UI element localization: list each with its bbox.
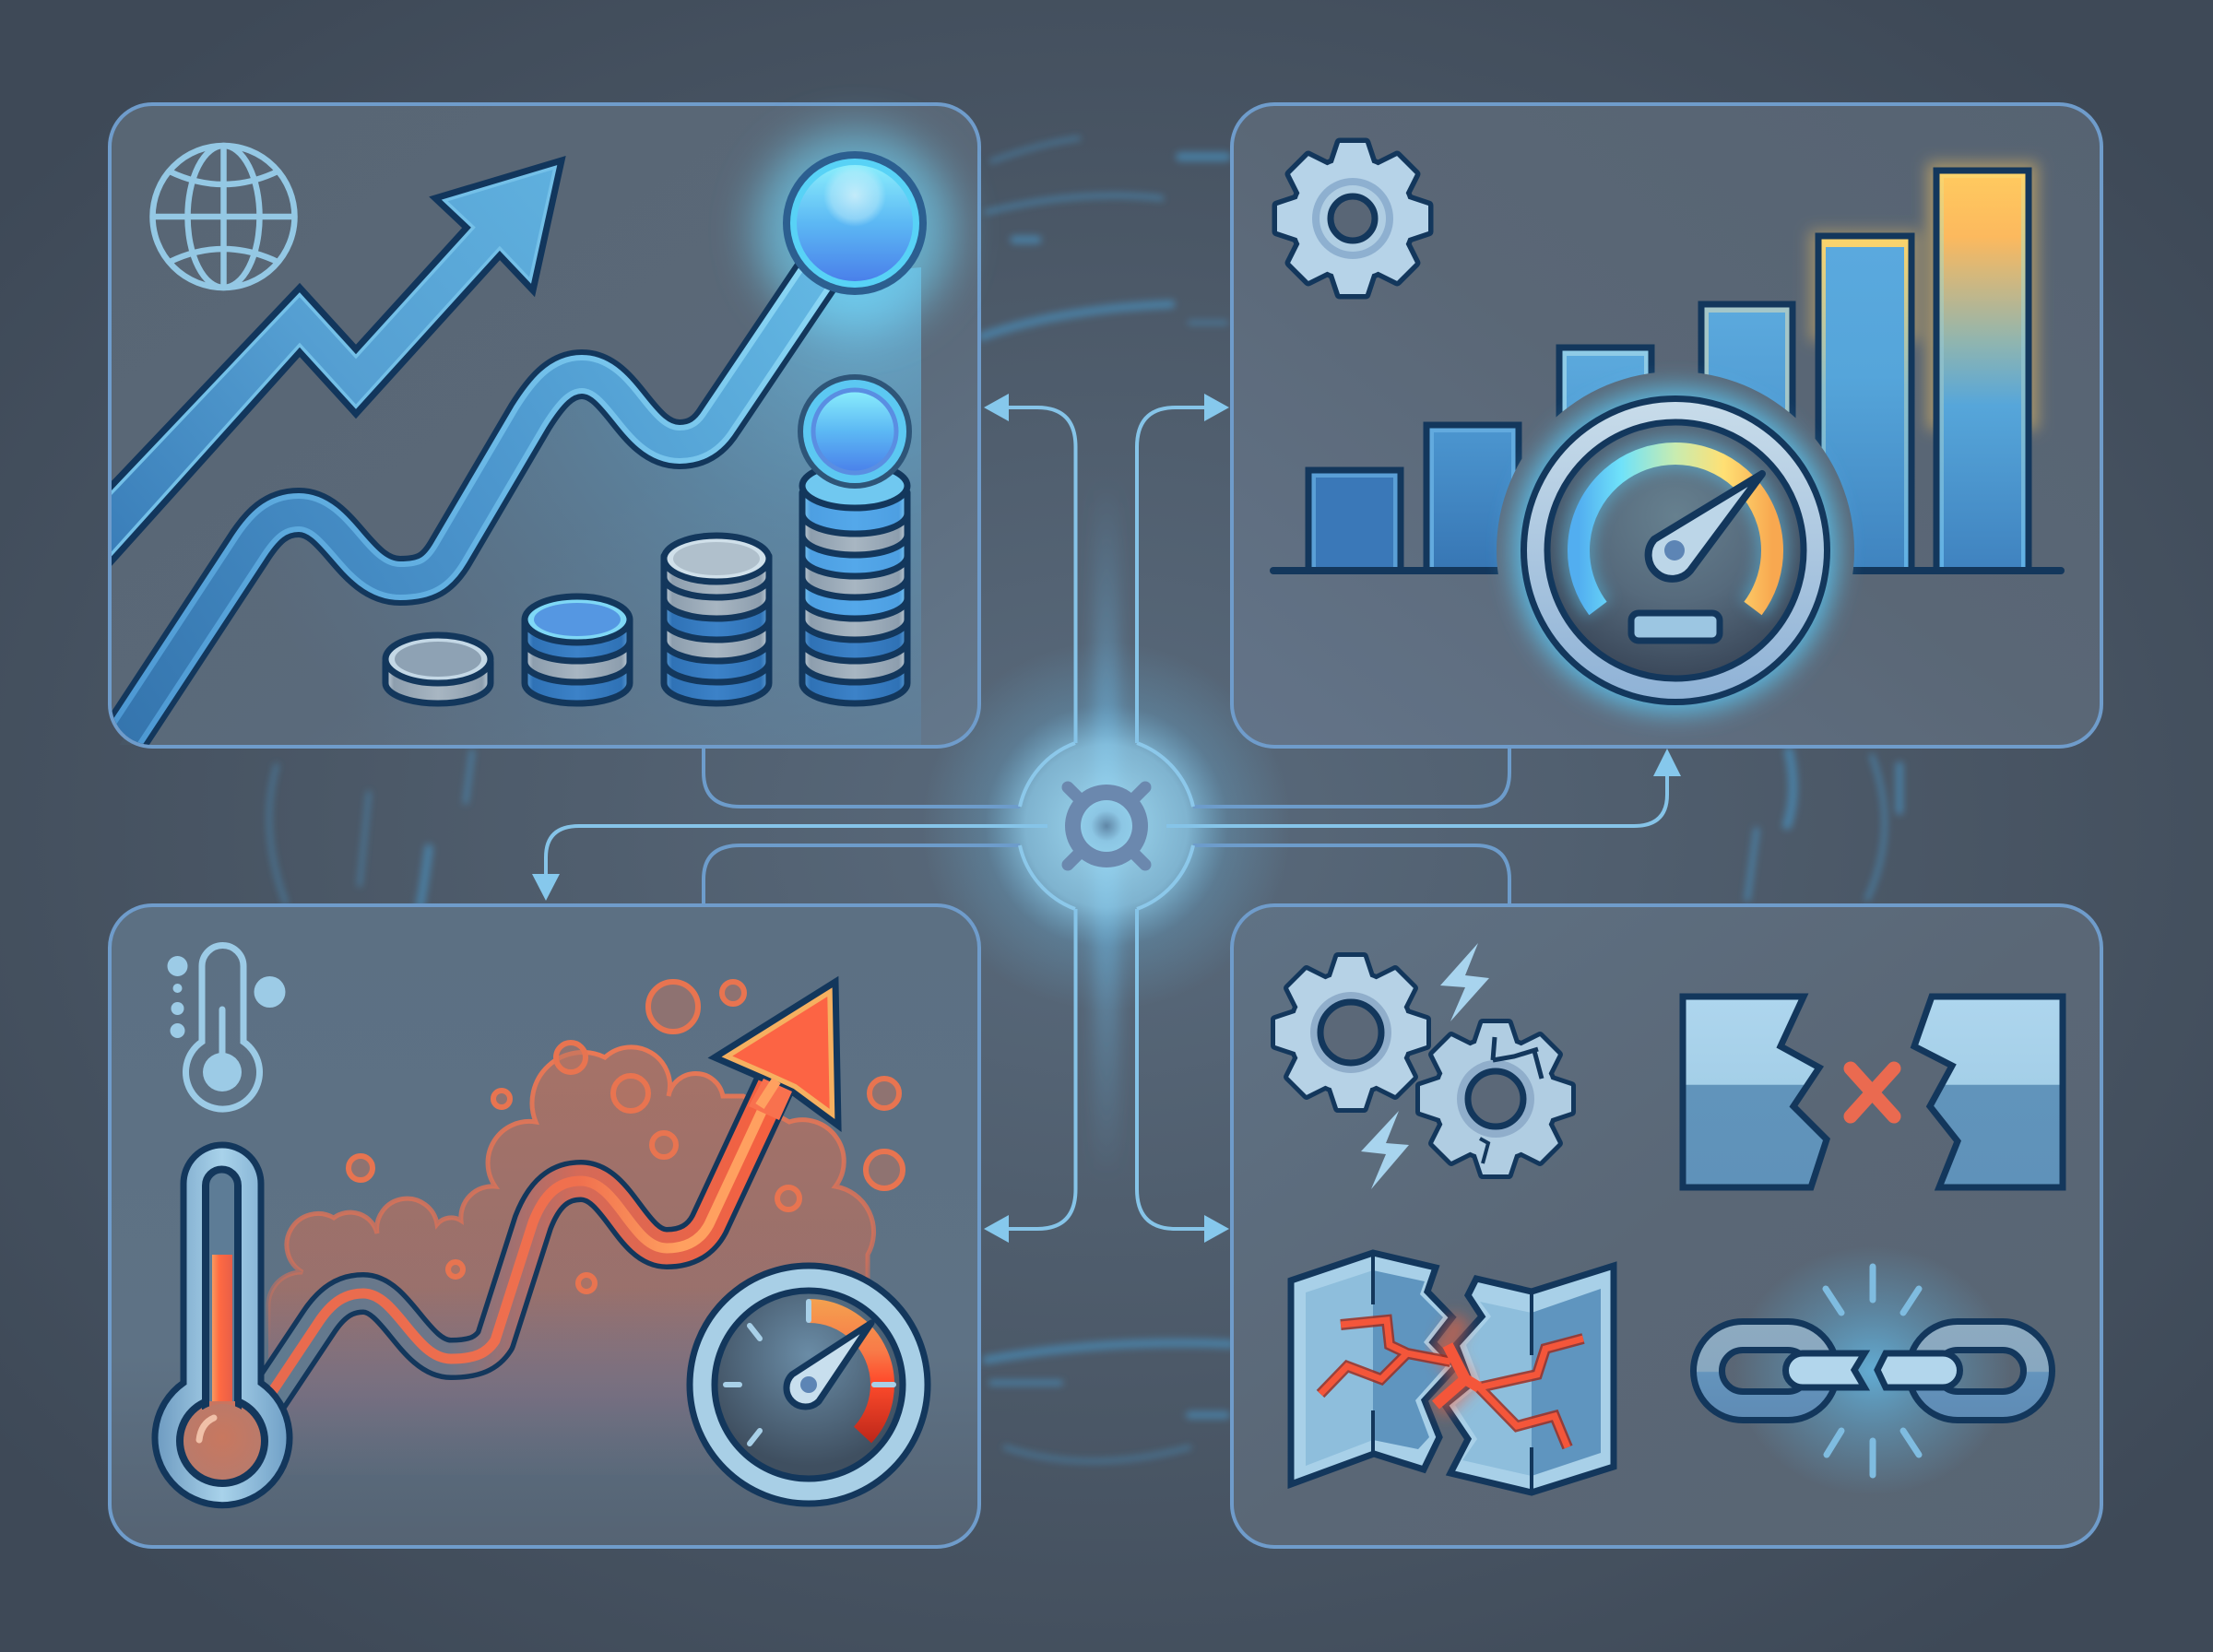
- break glow: [1734, 1246, 2011, 1495]
- large thermometer: [155, 1145, 290, 1505]
- arrow to top-right panel: [1137, 394, 1229, 743]
- coin stack 3: [664, 536, 769, 703]
- rising heat line: [263, 1074, 779, 1406]
- rising arrow: [92, 160, 562, 583]
- coin on top of stack: [800, 377, 909, 486]
- bar 6: [1936, 171, 2029, 571]
- central connector network: [532, 394, 1681, 1243]
- hub glow: [922, 642, 1291, 1010]
- growth curves and arrow: [92, 160, 816, 786]
- icon: torn map: [1291, 1253, 1614, 1493]
- icon: working gear: [1275, 957, 1426, 1108]
- glowing sphere: [786, 154, 924, 292]
- hub icon: [1065, 785, 1148, 867]
- spark rays: [1826, 1267, 1919, 1475]
- arrow to bottom-right panel: [1137, 909, 1229, 1243]
- baseline: [1270, 567, 2065, 574]
- right link: [1877, 1336, 2038, 1406]
- icon: cracked gear: [1420, 1023, 1571, 1174]
- arrow head: [715, 982, 838, 1126]
- coin stack 2: [525, 596, 630, 703]
- icon: gear: [1277, 143, 1428, 294]
- sphere glow: [755, 131, 954, 330]
- left link: [1708, 1336, 1864, 1406]
- bar 2: [1426, 425, 1519, 571]
- panel: breakdown: [1232, 905, 2101, 1547]
- panel: performance: [1232, 104, 2101, 747]
- icon: lightning bolts: [1361, 943, 1489, 1189]
- icon: broken document: [1683, 997, 2063, 1187]
- bar 3: [1556, 345, 1654, 417]
- icon: broken chain: [1708, 1246, 2038, 1495]
- heat cloud: [268, 1047, 874, 1475]
- panel: heat: [110, 905, 979, 1547]
- bar chart: [1270, 171, 2065, 574]
- bar 5: [1818, 236, 1911, 571]
- coin stack 4: [802, 464, 907, 703]
- arrow up to performance panel: [1166, 749, 1681, 826]
- arrow to top-left panel: [984, 394, 1075, 743]
- panel background: [110, 104, 979, 747]
- bracket connector lines: [704, 748, 1509, 905]
- icon: globe: [153, 146, 295, 288]
- blue haze below curve: [356, 267, 921, 745]
- yellow bar glow: [1809, 162, 2038, 430]
- panel background: [1232, 905, 2101, 1547]
- panel: growth: [92, 104, 979, 786]
- bar 4: [1698, 301, 1796, 419]
- wavy trend line: [92, 277, 816, 786]
- small gauge: [690, 1266, 928, 1504]
- icon: small thermometer with droplets: [168, 946, 286, 1109]
- bar 1: [1308, 470, 1401, 571]
- heat bubbles: [349, 982, 903, 1292]
- speedometer gauge: [1513, 388, 1838, 713]
- coin stack 1: [385, 635, 491, 703]
- panel background: [110, 905, 979, 1547]
- arrow down to heat panel: [532, 826, 1047, 901]
- panel background: [1232, 104, 2101, 747]
- hub ring arcs: [1020, 743, 1193, 909]
- arrow to bottom-left panel: [984, 909, 1075, 1243]
